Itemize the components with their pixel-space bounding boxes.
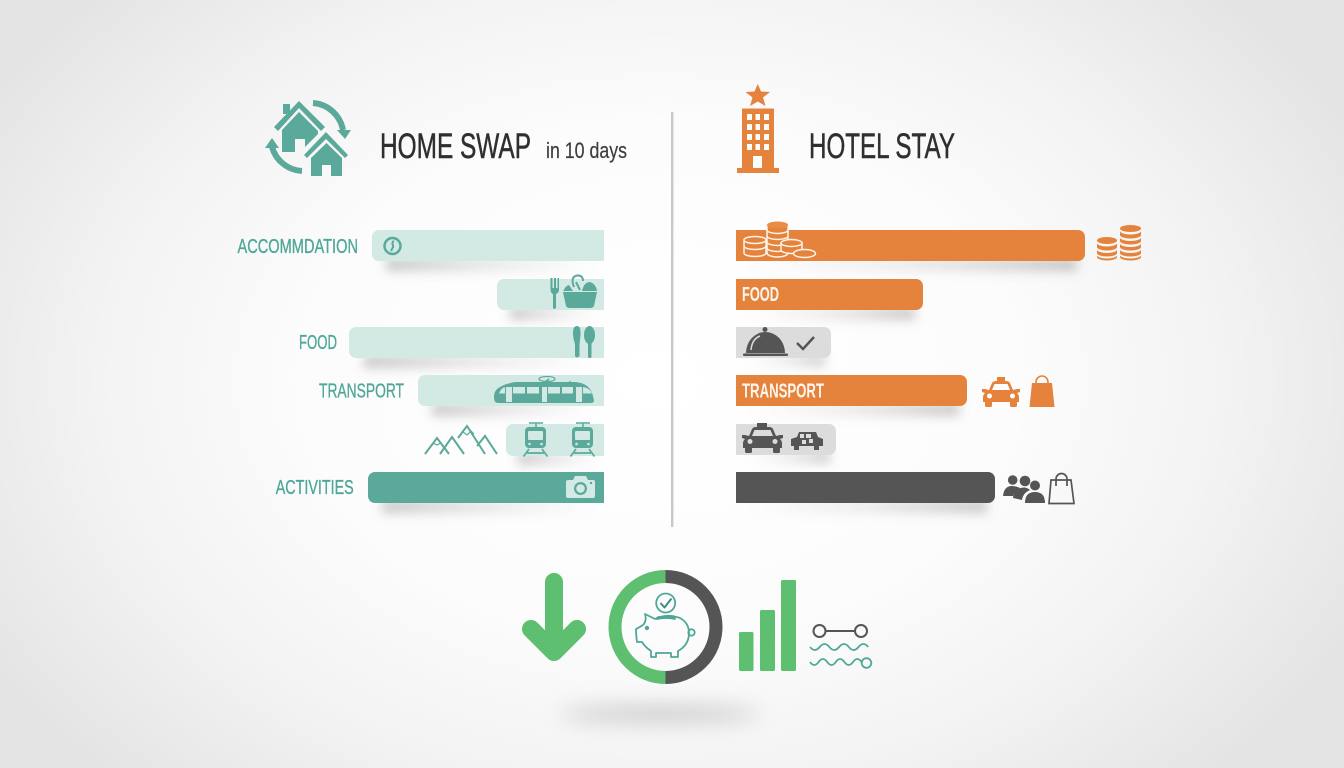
icon: connector and waves [810, 625, 871, 668]
icon: coins on bar [744, 222, 816, 258]
bar: hotel transport: TRANSPORT [742, 380, 824, 402]
bar: hotel activities [736, 472, 995, 513]
icon: orange taxi [982, 377, 1020, 407]
icon: home swap houses [265, 101, 351, 176]
chart: rising bars [739, 580, 796, 671]
bar: accommodation: ACCOMMDATION [238, 236, 358, 258]
bar: local transit [506, 423, 604, 465]
arrow: down [531, 582, 577, 652]
bar: activities [276, 472, 604, 513]
bar: food [299, 326, 604, 368]
bar: activities: ACTIVITIES [276, 477, 354, 499]
bar: transport [319, 375, 604, 416]
icon: mountains [425, 426, 497, 454]
icon: outline shopping bag [1049, 474, 1074, 504]
icon: hotel [737, 84, 779, 173]
panel: hotel stay [736, 84, 1141, 513]
icon: coin stacks [1097, 225, 1141, 260]
heading: home swap: HOME SWAP [380, 127, 531, 166]
bar: accommodation [238, 230, 604, 271]
panel: home swap [238, 101, 627, 513]
bar: hotel food [736, 279, 923, 320]
chart: savings donut [615, 576, 716, 678]
panel: savings summary [531, 576, 871, 720]
bar: transport: TRANSPORT [319, 380, 404, 402]
bar: food basket [497, 275, 604, 320]
icon: orange shopping bag [1030, 376, 1054, 407]
bar: hotel transport [736, 375, 967, 416]
icon: piggy bank [636, 594, 695, 657]
bar: room service [736, 327, 831, 366]
bar: food: FOOD [299, 332, 337, 354]
bar: hotel food: FOOD [742, 284, 779, 306]
bar: taxis [736, 423, 836, 463]
heading: hotel stay: HOTEL STAY [809, 127, 955, 166]
subheading: in 10 days: in 10 days [546, 138, 627, 163]
bar: hotel accommodation [736, 222, 1085, 271]
ground shadow [560, 708, 760, 720]
icon: people [1003, 475, 1045, 503]
